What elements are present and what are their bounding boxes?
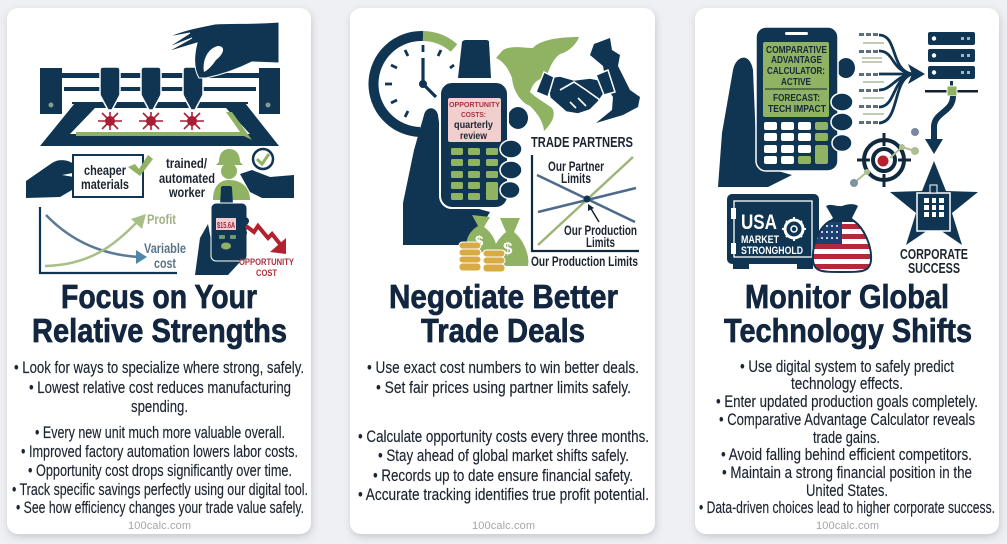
text block: monitoring bullets: technology effects. bbox=[791, 375, 903, 393]
panel: focus on your relative strengths bbox=[7, 8, 311, 534]
text block: monitoring bullets: trade gains. bbox=[813, 429, 880, 447]
heading: monitor global technology shifts bbox=[724, 278, 972, 349]
source credit: 100calc.com bbox=[128, 520, 191, 532]
text block: negotiation bullets: • Use exact cost numbers to win better deals. bbox=[367, 359, 639, 377]
text block: negotiation bullets: • Calculate opportunity costs every three months. bbox=[358, 428, 649, 446]
icon: hand holding calculator: COSTS: bbox=[461, 110, 486, 119]
heading: focus on your relative strengths: Relative Strengths bbox=[32, 312, 287, 349]
chart: trade partners limits: Limits bbox=[561, 171, 591, 186]
text block: strengths bullets: • Look for ways to specialize where strong, safely. bbox=[14, 359, 304, 377]
text block: strengths bullets bbox=[12, 359, 308, 517]
icon: handshake bbox=[536, 72, 608, 114]
icon: hand holding calculator: review bbox=[460, 130, 488, 142]
icon: hand holding cheaper materials note: cheaper bbox=[84, 163, 127, 178]
text block: strengths bullets: • Every new unit much more valuable overall. bbox=[35, 424, 285, 442]
text block: monitoring bullets: • Use digital system to safely predict bbox=[740, 358, 954, 376]
icon: hand holding advantage calculator: CALCULATOR: bbox=[767, 66, 825, 77]
icon: hand holding advantage calculator: TECH IMPACT bbox=[768, 104, 826, 115]
text block: negotiation bullets: • Stay ahead of global market shifts safely. bbox=[378, 447, 629, 465]
chart: trade partners limits: Our Production Limits bbox=[531, 254, 638, 269]
arrow: opportunity cost falling: OPPORTUNITY bbox=[239, 257, 294, 267]
icon: money bags and coins: $ bbox=[475, 233, 484, 250]
chart: trade partners limits: Our Partner bbox=[548, 159, 605, 174]
icon: handheld cost meter bbox=[195, 186, 249, 275]
text block: strengths bullets: • Improved factory automation lowers labor costs. bbox=[21, 443, 298, 461]
icon: world map bbox=[496, 37, 579, 131]
text block: monitoring bullets: United States. bbox=[806, 482, 888, 500]
icon: map of the uk bbox=[590, 38, 640, 123]
icon: hand holding calculator: quarterly bbox=[454, 119, 493, 131]
icon: usa market stronghold safe: MARKET bbox=[741, 234, 779, 246]
chart: trade partners limits: TRADE PARTNERS bbox=[531, 134, 633, 151]
icon: american flag money bag bbox=[810, 204, 874, 272]
text block: strengths bullets: • Lowest relative cost reduces manufacturing bbox=[29, 379, 291, 397]
icon: hand holding advantage calculator: FORECAST: bbox=[773, 93, 820, 104]
icon: quarterly clock bbox=[373, 36, 454, 132]
chart: trade partners limits bbox=[531, 134, 639, 269]
icon: hand holding cheaper materials note: materials bbox=[81, 177, 129, 192]
icon: corporate success star: SUCCESS bbox=[908, 261, 960, 277]
text block: strengths bullets: spending. bbox=[131, 398, 188, 416]
icon: hand holding calculator bbox=[403, 40, 528, 245]
arrow: server down to corporate success bbox=[925, 96, 953, 154]
label: trained automated worker: automated bbox=[159, 171, 215, 186]
arrow: opportunity cost falling: COST bbox=[256, 268, 277, 278]
icon: usa market stronghold safe: USA bbox=[741, 211, 777, 234]
chart: profit and variable cost: cost bbox=[154, 256, 176, 271]
heading: focus on your relative strengths: Focus on Your bbox=[61, 278, 257, 315]
icon: laser cutting machine bbox=[40, 67, 280, 146]
icon: usa market stronghold safe bbox=[727, 194, 819, 269]
icon: hand holding advantage calculator: COMPARATIVE bbox=[766, 45, 827, 56]
icon: target with data points bbox=[850, 128, 919, 187]
chart: profit and variable cost bbox=[40, 207, 186, 273]
label: trained automated worker: trained/ bbox=[166, 156, 207, 171]
text block: strengths bullets: • Track specific savings perfectly using our digital tool. bbox=[12, 481, 308, 499]
heading: focus on your relative strengths bbox=[32, 278, 287, 349]
icon: hand holding calculator: OPPORTUNITY bbox=[449, 100, 500, 109]
text block: strengths bullets: • Opportunity cost drops significantly over time. bbox=[28, 462, 292, 480]
arrow: opportunity cost falling bbox=[239, 226, 294, 278]
chart: trade partners limits: Our Production bbox=[564, 223, 637, 238]
text block: negotiation bullets bbox=[358, 359, 649, 504]
text block: negotiation bullets: • Records up to date ensure financial safety. bbox=[373, 467, 633, 485]
icon: data streams converging into arrow bbox=[859, 33, 925, 124]
heading: negotiate better trade deals bbox=[389, 278, 618, 349]
source credit: 100calc.com bbox=[816, 520, 879, 532]
text block: strengths bullets: • See how efficiency changes your trade value safely. bbox=[16, 499, 304, 517]
heading: monitor global technology shifts: Monitor Global bbox=[745, 278, 949, 315]
icon: money bags and coins: $ bbox=[503, 239, 513, 258]
icon: worker with hard hat bbox=[213, 149, 250, 200]
icon: hand with magnifier check bbox=[240, 149, 294, 198]
icon: money bags and coins bbox=[459, 215, 528, 272]
text block: monitoring bullets bbox=[699, 358, 995, 517]
text block: negotiation bullets: • Accurate tracking identifies true profit potential. bbox=[358, 486, 649, 504]
icon: corporate success star bbox=[890, 161, 978, 277]
icon: hand holding advantage calculator bbox=[718, 27, 855, 187]
icon: server stack bbox=[925, 32, 978, 96]
label: trained automated worker: worker bbox=[168, 185, 206, 200]
icon: handheld cost meter: $15.6A bbox=[217, 221, 235, 230]
heading: negotiate better trade deals: Trade Deals bbox=[421, 312, 585, 349]
chart: profit and variable cost: Profit bbox=[147, 212, 176, 227]
chart: trade partners limits: Limits bbox=[586, 235, 615, 250]
label: trained automated worker bbox=[159, 156, 215, 200]
source credit: 100calc.com bbox=[472, 520, 535, 532]
heading: negotiate better trade deals: Negotiate Better bbox=[389, 278, 618, 315]
panel: monitor global technology shifts bbox=[695, 8, 999, 534]
icon: hand holding advantage calculator: ACTIVE bbox=[781, 77, 811, 88]
icon: hand holding cheaper materials note bbox=[26, 155, 153, 198]
text block: negotiation bullets: • Set fair prices using partner limits safely. bbox=[376, 379, 631, 397]
chart: profit and variable cost: Variable bbox=[144, 241, 186, 256]
panel: negotiate better trade deals bbox=[350, 8, 655, 534]
icon: hand adjusting the laser bbox=[167, 22, 279, 78]
icon: usa market stronghold safe: STRONGHOLD bbox=[741, 245, 803, 257]
heading: monitor global technology shifts: Technology Shifts bbox=[724, 312, 972, 349]
icon: hand holding advantage calculator: ADVANTAGE bbox=[771, 55, 822, 66]
icon: corporate success star: CORPORATE bbox=[900, 247, 968, 263]
